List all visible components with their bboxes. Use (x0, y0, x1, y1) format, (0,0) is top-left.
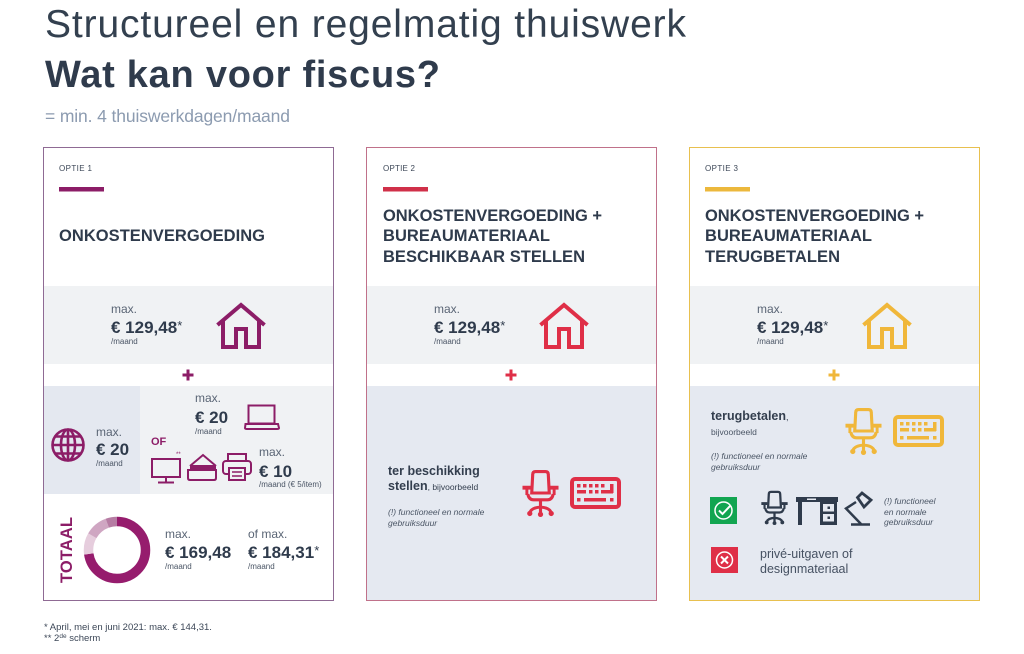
footnotes: scherm (67, 633, 100, 644)
subtitle question: Wat kan voor fiscus? (45, 54, 440, 96)
icon: monitor: ** (176, 452, 181, 458)
band: provided equipment: (!) functioneel en normale (388, 507, 485, 517)
band: equipment allowance (140, 386, 333, 494)
panel: optie 2 (366, 148, 656, 600)
icon: globe (52, 430, 84, 460)
icon: desk (796, 497, 838, 525)
accent bar 3 (705, 187, 750, 192)
total section: € 169,48 (165, 543, 231, 562)
band: provided equipment: gebruiksduur (388, 518, 438, 528)
heading 2: ONKOSTENVERGOEDING + (383, 207, 602, 225)
accent bar 2 (383, 187, 428, 192)
band: reimbursed equipment: privé-uitgaven of (760, 547, 853, 561)
icon: yellow office chair (845, 410, 882, 455)
footnotes: de (59, 633, 67, 640)
icon: laptop (245, 406, 279, 429)
icon: dark chair (761, 492, 788, 525)
icon: yellow keyboard (895, 417, 942, 445)
band: reimbursed equipment: en normale (884, 507, 927, 517)
heading 1: ONKOSTENVERGOEDING (59, 227, 265, 245)
total section (58, 517, 319, 583)
band: provided equipment: stellen, bijvoorbeeld (388, 479, 478, 493)
plus sign 3 (828, 370, 840, 380)
band: home allowance 2 (367, 286, 656, 364)
total section: max. (165, 527, 191, 541)
band: internet allowance: /maand (96, 459, 123, 468)
panel: optie 3 (690, 148, 980, 600)
accent bar 1 (59, 187, 104, 192)
band: reimbursed equipment: designmateriaal (760, 562, 848, 576)
total section: € 184,31 (248, 543, 314, 562)
band: home allowance 1: max. (111, 302, 137, 316)
plus sign 2 (506, 370, 516, 380)
panel: optie 1 (44, 148, 334, 600)
heading 2: BUREAUMATERIAAL (383, 227, 550, 245)
heading 2: BESCHIKBAAR STELLEN (383, 248, 585, 266)
donut chart (88, 522, 146, 578)
band: home allowance 3: /maand (757, 337, 784, 346)
footnotes (44, 622, 212, 644)
icon: check badge (710, 497, 737, 524)
band: home allowance 3: * (823, 318, 828, 333)
band: home allowance 3: max. (757, 302, 783, 316)
total section: of max. (248, 527, 287, 541)
band: equipment allowance: /maand (195, 427, 222, 436)
band: internet allowance: max. (96, 425, 122, 439)
total section: * (314, 543, 319, 558)
band: reimbursed equipment: bijvoorbeeld (711, 427, 757, 437)
band: home allowance 1 (44, 286, 333, 364)
band: home allowance 1: /maand (111, 337, 138, 346)
band: equipment allowance: € 20 (195, 408, 228, 427)
heading 3: ONKOSTENVERGOEDING + (705, 207, 924, 225)
band: equipment allowance: € 10 (259, 462, 292, 481)
option label 2: OPTIE 2 (383, 164, 416, 173)
band: home allowance 2: * (500, 318, 505, 333)
band: internet allowance: € 20 (96, 440, 129, 459)
definition line: = min. 4 thuiswerkdagen/maand (45, 106, 290, 126)
plus sign 1 (182, 370, 194, 380)
band: reimbursed equipment: gebruiksduur (711, 462, 761, 472)
band: equipment allowance: max. (195, 391, 221, 405)
band: reimbursed equipment (690, 386, 979, 600)
total label: TOTAAL (58, 517, 76, 583)
band: reimbursed equipment: gebruiksduur (884, 517, 934, 527)
icon: desk lamp (846, 493, 871, 524)
band: provided equipment: ter beschikking (388, 464, 480, 478)
of label: OF (151, 436, 167, 448)
band: home allowance 2: max. (434, 302, 460, 316)
option label 1: OPTIE 1 (59, 164, 93, 173)
band: home allowance 2: € 129,48 (434, 318, 500, 337)
icon: printer (223, 454, 251, 480)
icon: monitor (152, 452, 181, 482)
heading 3: BUREAUMATERIAAL (705, 227, 872, 245)
band: home allowance 1: € 129,48 (111, 318, 177, 337)
band: reimbursed equipment: (!) functioneel (884, 496, 937, 506)
footnotes: ** 2 (44, 633, 59, 644)
band: home allowance 3: € 129,48 (757, 318, 823, 337)
band: provided equipment (367, 386, 656, 600)
option label 3: OPTIE 3 (705, 164, 739, 173)
band: equipment allowance: max. (259, 445, 285, 459)
band: home allowance 1: * (177, 318, 182, 333)
band: equipment allowance: /maand (€ 5/item) (259, 480, 322, 489)
icon: keyboard (572, 479, 619, 507)
band: internet allowance (44, 386, 140, 494)
total section: /maand (248, 562, 275, 571)
title: Structureel en regelmatig thuiswerk (45, 3, 686, 46)
footnotes: * April, mei en juni 2021: max. € 144,31. (44, 622, 212, 633)
band: reimbursed equipment: terugbetalen, (711, 409, 789, 423)
band: home allowance 2: /maand (434, 337, 461, 346)
icon: scanner (188, 455, 216, 480)
total section: /maand (165, 562, 192, 571)
band: reimbursed equipment: (!) functioneel en normale (711, 451, 808, 461)
band: home allowance 3 (690, 286, 979, 364)
icon: cross badge (711, 547, 738, 573)
icon: office chair (522, 472, 559, 517)
heading 3: TERUGBETALEN (705, 248, 840, 266)
